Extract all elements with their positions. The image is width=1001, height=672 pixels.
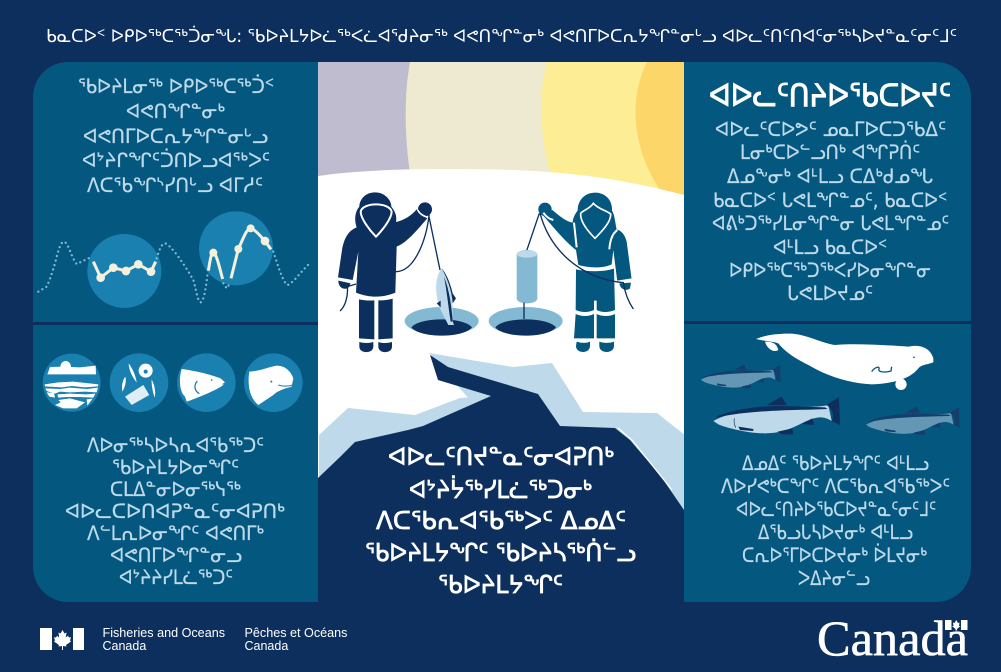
solid line two	[208, 224, 271, 279]
text: top right: ᒪᓂᒃᑕᐅᓪᓗᑎᒃ ᐊᖏᕈᑏᑦ	[740, 141, 920, 164]
text: top right: ᐊᐅᓚᑦᑕᐅᕗᑦ ᓄᓇᒥᐅᑕᑐᖃᐃᑦ	[715, 118, 946, 141]
logo: Government of Canada flag	[40, 628, 84, 650]
text: bottom right: ᐃᖃᓗᒐᓴᐅᔪᓂᒃ ᐊᒻᒪᓗ	[758, 521, 913, 544]
text: top left: ᐊᔾᔨᒋᖏᑦᑑᑎᐅᓗᐊᖅᐳᑦ	[82, 149, 270, 172]
highlight circle one	[87, 234, 161, 308]
text: top left: ᐱᑕᖃᖏᔅᓯᑎᒡᓗ ᐊᒥᓱᑦ	[87, 174, 263, 197]
text: central callout: ᖃᐅᔨᒪᔭᖏᑦ	[438, 571, 563, 599]
title: ᑲᓇᑕᐅᑉ ᐅᑭᐅᖅᑕᖅᑑᓂᖓ: ᖃᐅᔨᒪᔭᐅᓛᖅᐸᓛᐊᖁᔨᓂᖅ ᐊᕙᑎᖏᓐᓂᒃ ᐊᕙᑎᒥᐅᑕᕆᔭᖏᓐᓂᒡᓗ ᐊᐅᓚᑦᑎᑦᑎᐊᑦᓂᖅᓴᐅᔪᓐᓇᑦᓂᑦᒧᑦ	[46, 26, 957, 47]
text: top right: ᑲᓇᑕᐅᑉ ᒐᕙᒪᖏᓐᓄᑦ, ᑲᓇᑕᐅᑉ	[713, 189, 947, 212]
text: top left: ᐊᕙᑎᒥᐅᑕᕆᔭᖏᓐᓂᒡᓗ	[83, 125, 268, 148]
text: bottom left: ᐊᕙᑎᒥᐅᖏᓐᓂᓗ	[110, 544, 242, 567]
text: top right	[712, 118, 949, 305]
text: top right: ᐃᓄᖕᓂᒃ ᐊᒻᒪᓗ ᑕᐃᒃᑯᓄᖓ	[727, 165, 933, 188]
white crack highlight	[618, 428, 672, 490]
person left: fisher	[338, 192, 440, 352]
icons: four topic circles	[43, 353, 303, 412]
heading: top right: ᐊᐅᓚᑦᑎᔨᐅᖃᑕᐅᔪᑦ	[709, 78, 951, 114]
solid line one	[93, 260, 156, 282]
panel: bottom left	[33, 325, 318, 602]
text: bottom right: ᐳᐃᔨᓂᓪᓗ	[798, 567, 870, 590]
sampling cylinder	[517, 250, 537, 319]
panel: central scene	[318, 62, 685, 602]
text: central callout: ᐊᔾᔨᔮᖅᓯᒪᓛᖅᑐᓂᒃ	[409, 475, 592, 504]
fish small left	[701, 364, 781, 388]
text: department name French: Canada	[244, 639, 288, 653]
text: department name English	[102, 626, 225, 653]
text: top right: ᐊᕕᒃᑐᖅᓯᒪᓂᖏᓐᓂ ᒐᕙᒪᖏᓐᓄᑦ	[712, 212, 949, 235]
ice hole left	[405, 307, 479, 336]
fish small right	[866, 407, 960, 435]
fish large	[713, 397, 840, 434]
text: top left: ᐊᕙᑎᖏᓐᓂᒃ	[126, 100, 225, 123]
text: bottom left	[65, 434, 285, 589]
dotted line	[38, 242, 311, 302]
sky background	[318, 62, 684, 202]
panel: bottom right	[684, 324, 971, 602]
text: central callout: ᐊᐅᓚᑦᑎᔪᓐᓇᑦᓂᐊᕈᑎᒃ	[388, 443, 614, 471]
ice crack light edge	[319, 353, 685, 602]
text: top left: ᖃᐅᔨᒪᓂᖅ ᐅᑭᐅᖅᑕᖅᑑᑉ	[78, 75, 274, 98]
text: top left	[78, 75, 274, 197]
text: department name French: Pêches et Océans	[244, 626, 348, 640]
text: bottom left: ᐊᐅᓚᑕᐅᑎᐊᕈᓐᓇᑦᓂᐊᕈᑎᒃ	[65, 500, 285, 523]
icon: sampling gear	[110, 353, 168, 412]
icon: beluga head	[244, 353, 303, 412]
highlight circle two	[199, 211, 273, 285]
person right: scientist	[526, 193, 633, 352]
text: top right: ᐅᑭᐅᖅᑕᖅᑐᖅᐸᓯᐅᓂᖏᓐᓂ	[729, 259, 931, 282]
text: bottom left: ᖃᐅᔨᒪᔭᐅᓂᖏᑦ	[112, 456, 239, 479]
text: bottom right: ᑕᕆᐅᕐᒥᐅᑕᐅᔪᓂᒃ ᐆᒪᔪᓂᒃ	[742, 544, 927, 567]
text: central callout: ᐱᑕᖃᕆᐊᖃᖅᐳᑦ ᐃᓄᐃᑦ	[376, 507, 626, 535]
text: top right: ᒐᕙᒪᐅᔪᓄᑦ	[787, 282, 873, 305]
text: bottom left: ᐊᔾᔨᔨᓯᒪᓛᖅᑐᑦ	[119, 566, 233, 589]
text: department name English: Fisheries and Oceans	[102, 626, 225, 640]
beluga	[756, 334, 933, 390]
text: central callout: ᖃᐅᔨᒪᔭᖏᑦ ᖃᐅᔨᓴᖅᑏᓪᓗ	[365, 538, 636, 567]
logo: Canada wordmark: Canada	[817, 610, 968, 666]
text: department name French	[244, 626, 348, 653]
text: top right: ᐊᒻᒪᓗ ᑲᓇᑕᐅᑉ	[773, 236, 887, 259]
text: bottom right: ᐃᓄᐃᑦ ᖃᐅᔨᒪᔭᖏᑦ ᐊᒻᒪᓗ	[742, 452, 929, 475]
text: department name English: Canada	[102, 639, 146, 653]
illustration: two people on the ice	[338, 192, 633, 352]
ice hole right	[489, 307, 563, 336]
text: bottom left: ᐱᐅᓂᖅᓴᐅᓴᕆᐊᖃᖅᑐᑦ	[87, 434, 264, 457]
chart: dotted trend line with highlighted circles	[38, 211, 311, 308]
text: bottom right: ᐊᐅᓚᑦᑎᔨᐅᖃᑕᐅᔪᓐᓇᑦᓂᑦᒧᑦ	[736, 498, 936, 521]
text: bottom left: ᐱᓪᒪᕆᐅᓂᖏᑦ ᐊᕙᑎᒥᒃ	[87, 522, 264, 545]
text: central callout	[365, 443, 636, 599]
panel: top left	[33, 62, 318, 322]
panel: top right	[684, 62, 971, 321]
text: bottom right	[721, 452, 950, 590]
fish on line	[436, 268, 456, 325]
sea ice	[318, 169, 684, 602]
text: bottom right: ᐱᐅᓯᕙᒃᑕᖏᑦ ᐱᑕᖃᕆᐊᖃᖅᐳᑦ	[721, 475, 950, 498]
illustration: beluga and fish	[701, 334, 960, 435]
icon: sea ice	[43, 354, 101, 412]
icon: fish head	[177, 353, 236, 412]
text: bottom left: ᑕᒪᐃᓐᓂᐅᓂᖅᓭᖅ	[110, 478, 241, 501]
open water	[318, 355, 684, 602]
